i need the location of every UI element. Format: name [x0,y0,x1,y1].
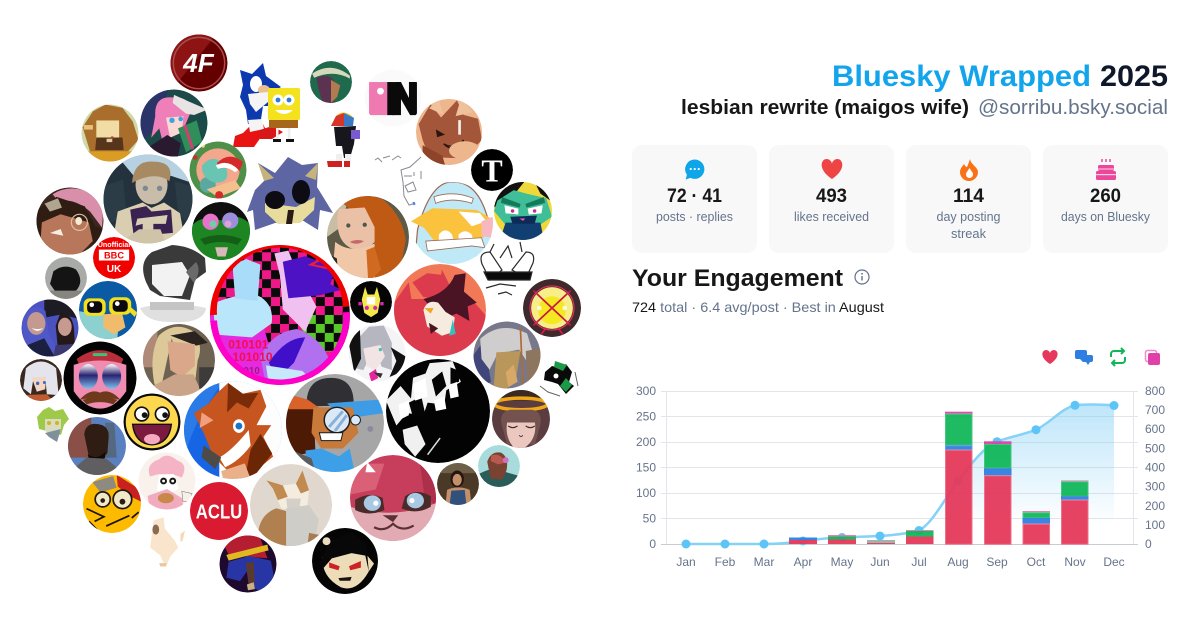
icon: reposts [1111,348,1125,366]
avatar: ACLU [190,482,248,540]
right axis labels: 0 [1145,537,1152,551]
sprite: Sonic and SpongeBob [233,63,300,147]
bar: Oct [1022,511,1050,544]
heading: Your Engagement: Your Engagement [632,265,843,292]
month labels: Feb [715,555,736,569]
avatar: Unofficial BBC UK: UK [107,264,122,275]
avatar: fox character [184,381,282,480]
line markers [682,401,1118,548]
card: likes received: likes received [794,210,869,224]
month labels: Aug [947,555,969,569]
avatar: blue-haired character [220,536,276,592]
right axis labels: 800 [1145,384,1165,398]
engagement summary: 724 total · 6.4 avg/post · Best in August [632,299,884,315]
avatar: green blob sketch [540,361,578,396]
chart: monthly engagement [636,384,1165,569]
avatar: bw anime character [348,324,406,382]
left axis labels [636,384,656,551]
card: days on Bluesky: 260 [1090,186,1121,207]
card: days on Bluesky: days on Bluesky [1061,210,1151,224]
cumulative line [686,405,1114,544]
left axis labels: 100 [636,486,656,500]
grid lines [661,391,1138,544]
bar: Sep [984,441,1012,544]
right axis labels: 400 [1145,460,1165,474]
month labels: Nov [1064,555,1086,569]
avatar: Unofficial BBC UK: BBC [104,250,124,260]
avatar: yellow sunglasses character [79,281,137,339]
icon: heart [1042,350,1058,364]
avatar: green crocodile [192,202,250,260]
right axis labels: 200 [1145,499,1165,513]
avatar: christmas couple [190,142,246,199]
avatar: 4F logo [170,34,228,92]
right axis labels: 100 [1145,518,1165,532]
bar: Jun [867,540,895,544]
right axis labels: 300 [1145,480,1165,494]
avatar: pink cat [350,455,436,541]
avatar: central checker collage [210,244,350,385]
cumulative area [686,405,1114,544]
avatar: couple selfie [22,300,78,356]
month labels: Jun [870,555,890,569]
card: likes received: 493 [816,186,847,207]
avatar: Unofficial BBC UK [93,237,135,279]
card: day posting streak: 114 [953,186,984,207]
month labels: Sep [986,555,1008,569]
avatar: black-haired vampire girl [312,528,378,594]
avatar: pink Mario face [64,342,136,414]
avatar: yellow skull logo [523,279,581,337]
avatar: pink hat person [36,188,104,254]
avatar: grey-haired anime character [474,322,540,388]
avatar: anime white-haired girl [20,359,62,401]
handle: @sorribu.bsky.social [978,97,1168,119]
avatar: green hat character [310,61,352,103]
avatar: 4F logo: 4F [182,48,215,78]
avatar: central checker collage: 010101 [228,338,269,352]
stacked bars [789,412,1088,544]
month labels: May [831,555,853,569]
avatar: teal mask character [494,182,552,240]
panel: stat cards [632,145,1168,253]
icon: info [855,270,869,284]
sprite: Sonic.exe head [247,157,333,230]
avatar: pink fluffy creature [138,452,196,510]
avatar: yellow pikachu [83,475,141,533]
month labels [676,555,1125,569]
avatar: orange character with cap [286,374,384,472]
sprite: Shadow with propeller hat [327,112,360,167]
avatar: PN logo [369,82,417,116]
avatar: epic smiley [125,395,179,449]
right axis labels: 600 [1145,422,1165,436]
avatar: pink anime character [140,90,208,156]
avatar: blonde woman [143,324,215,396]
icon: replies [1075,350,1093,365]
chart legend [1042,348,1160,366]
avatar: Tails [411,182,493,264]
avatar: pixel bear [82,104,138,162]
avatar: central checker collage: 1010 [238,366,260,377]
avatar: black and white hands [386,359,490,463]
month labels: Jan [676,555,696,569]
month labels: Oct [1027,555,1046,569]
title [832,60,1168,93]
card: posts and replies: posts · replies [656,210,733,224]
card: day posting streak [906,145,1031,253]
bar: Jul [906,530,934,544]
card: posts and replies [632,145,757,253]
avatar: central checker collage: 101010 [232,350,273,364]
avatar: sketch character [375,156,421,205]
card: likes received [769,145,894,253]
avatar: small bald man painting [478,445,520,487]
avatar: orange and grey cat [250,464,332,546]
card: day posting streak: day posting [936,210,1001,224]
avatar: red horned creature [394,264,486,356]
icon: quotes [1146,350,1160,365]
avatar: redhead woman [327,196,409,278]
avatar: beetle-haired character [37,407,69,442]
avatar: small black robot [350,281,392,323]
avatar: brown creature [416,99,482,165]
sprite: grey winking girl [140,245,206,322]
display name: lesbian rewrite (maigos wife) [681,97,969,119]
left axis labels: 300 [636,384,656,398]
avatar: black dog [45,257,87,299]
bar: Nov [1061,480,1088,544]
avatar cluster [20,34,581,594]
month labels: Apr [794,555,812,569]
avatar: white angry eyes sketch [481,242,534,295]
bar: May [828,535,856,544]
bar: Apr [789,538,817,544]
year: 2025 [1100,60,1168,93]
avatar: ACLU: ACLU [196,502,242,524]
avatar: man in hoodie [68,417,126,475]
avatar: New York Times [471,149,513,191]
left axis labels: 250 [636,410,656,424]
avatar: Unofficial BBC UK: Unofficial [98,241,130,249]
left axis labels: 200 [636,435,656,449]
month labels: Jul [911,555,927,569]
card: day posting streak: streak [951,227,987,241]
left axis labels: 50 [643,512,656,526]
avatar: boy in varsity jacket [104,154,192,244]
left axis labels: 0 [649,537,656,551]
bar: Aug [945,412,972,544]
month labels: Mar [754,555,774,569]
card: posts and replies: 72 · 41 [667,186,722,207]
right axis labels: 500 [1145,442,1165,456]
subtitle: display name and handle [681,97,1168,119]
right axis labels [1145,384,1165,551]
card: days on Bluesky [1043,145,1168,253]
avatar: girl photo [437,463,479,505]
avatar: halo girl [492,390,550,448]
right axis labels: 700 [1145,403,1165,417]
avatar: New York Times: T [481,153,503,188]
avatar: pale anime face [150,517,185,567]
month labels: Dec [1103,555,1125,569]
left axis labels: 150 [636,460,656,474]
title text: Bluesky Wrapped [832,60,1091,93]
